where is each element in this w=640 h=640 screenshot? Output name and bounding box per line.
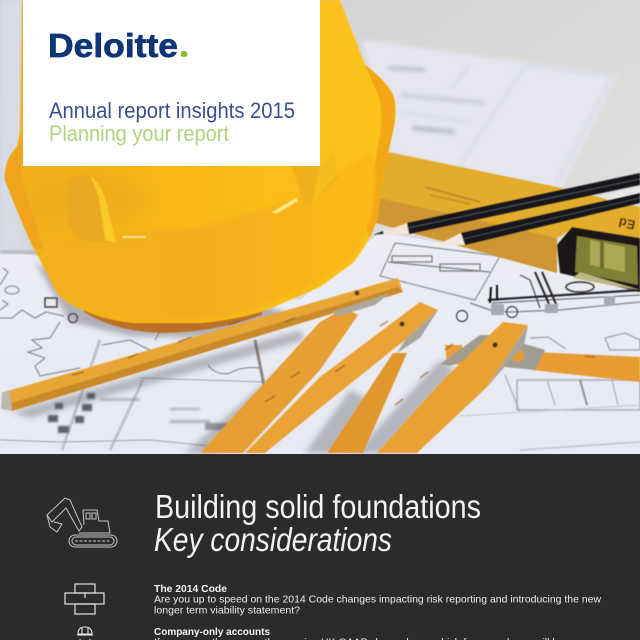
ruler 3	[245, 302, 438, 453]
ruler 1	[2, 278, 403, 411]
item heading: Company-only accounts	[154, 626, 270, 638]
hat right vent	[272, 150, 338, 214]
icon: bricks	[65, 584, 104, 614]
report title: Annual report insights 2015	[49, 98, 295, 123]
blueprint dark spots	[48, 393, 230, 433]
ruler 6 horizontal	[532, 352, 640, 382]
white title card	[23, 0, 320, 166]
dark plan walls, right	[488, 272, 640, 315]
ruler tick marks	[72, 318, 595, 405]
hard hat underside	[84, 300, 262, 333]
hat brim	[33, 152, 376, 320]
ruler 4	[327, 353, 407, 453]
text block: The 2014 Code	[154, 583, 601, 616]
icon: excavator	[47, 498, 117, 547]
blueprint line drawings, left	[0, 268, 265, 450]
blurred desk background	[0, 0, 640, 454]
Deloitte logo: Deloitte	[48, 27, 178, 64]
item heading: The 2014 Code	[154, 583, 227, 595]
spirit level yellow block	[370, 150, 640, 292]
blurred background plan sheet	[362, 40, 617, 190]
spirit level yellow block: Ed	[617, 215, 637, 233]
hat left vent	[68, 175, 146, 243]
icon: small hard hat	[77, 627, 93, 640]
ruler 5	[377, 322, 528, 453]
text block: The 2014 Code: longer term viability statement?	[154, 604, 300, 616]
blueprint line drawings, right	[380, 243, 640, 450]
report subtitle: Planning your report	[49, 121, 229, 146]
hard hat	[5, 0, 395, 323]
hard hat shadow	[35, 262, 300, 338]
heading line one: Building solid foundations	[155, 488, 481, 525]
hat left shaded band	[28, 172, 152, 228]
pencils	[373, 173, 640, 246]
hat shell right rim	[365, 65, 395, 237]
blueprint sheet on table	[0, 232, 640, 454]
ruler shadows	[12, 330, 455, 453]
hat left rim	[5, 140, 44, 250]
ruler 2	[200, 308, 358, 453]
folding rulers	[1, 278, 640, 453]
left blurred strip	[0, 0, 24, 250]
section heading	[154, 488, 481, 558]
item body: Are you up to speed on the 2014 Code changes impacting risk reporting and introducing the new	[154, 594, 601, 606]
dark lower panel	[0, 454, 640, 640]
heading line two: Key considerations	[154, 521, 392, 558]
hat shell	[5, 0, 395, 323]
photo: hard hat and blueprints	[0, 0, 640, 454]
text block: Company-only accounts	[154, 626, 564, 640]
